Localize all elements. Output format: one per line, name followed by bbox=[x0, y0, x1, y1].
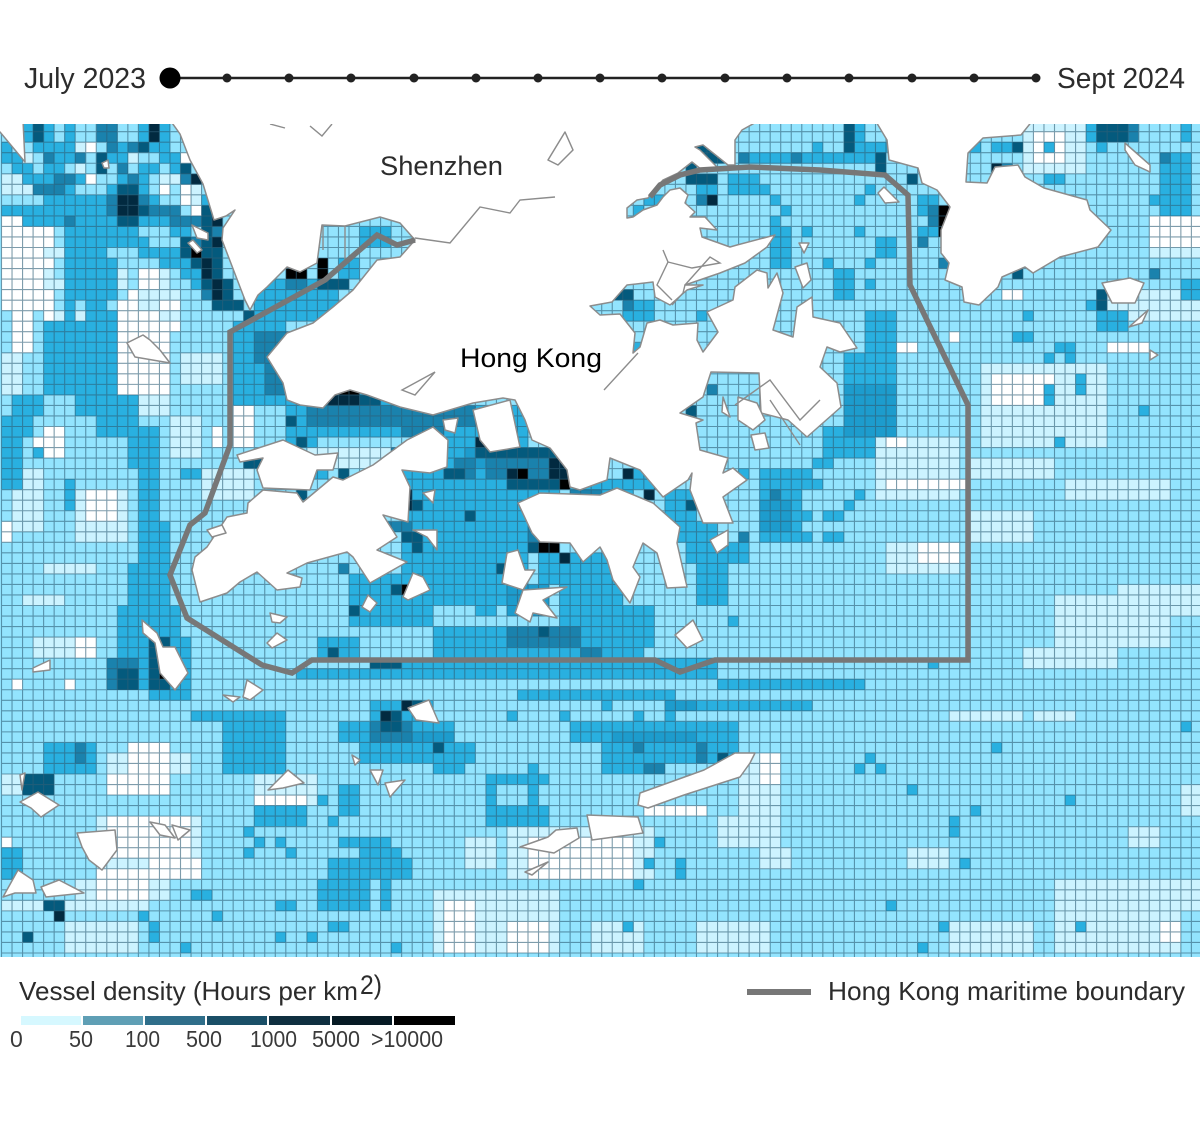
timeline steps bbox=[222, 74, 1040, 82]
lightest density cells bbox=[2, 121, 1200, 953]
timeline bbox=[24, 63, 1185, 95]
legend scale labels: 5000 bbox=[312, 1026, 360, 1052]
land border lines bbox=[270, 124, 820, 445]
land: eastern islets bbox=[722, 143, 1158, 450]
land masses bbox=[0, 120, 1158, 897]
stronger medium density cells bbox=[412, 384, 897, 742]
boundary label: Hong Kong maritime boundary bbox=[828, 976, 1185, 1006]
legend scale labels: >10000 bbox=[371, 1026, 443, 1052]
legend title superscript: 2) bbox=[360, 970, 382, 1000]
timeline start label: July 2023 bbox=[24, 63, 146, 95]
grid overlay bbox=[2, 121, 1200, 964]
land: Shenzhen and Hong Kong mainland bbox=[170, 120, 857, 523]
timeline track bbox=[170, 77, 1036, 79]
legend scale labels bbox=[10, 1026, 443, 1052]
legend scale labels: 50 bbox=[69, 1026, 93, 1052]
land: Lantau Island bbox=[192, 427, 448, 602]
timeline current position bbox=[160, 68, 180, 88]
white zero-density cells bbox=[2, 132, 1200, 953]
land: Dapeng peninsula bbox=[875, 120, 1111, 305]
land: Wailingding bbox=[408, 700, 439, 723]
medium density cells bbox=[2, 121, 1200, 953]
land: islets around Lantau bbox=[207, 418, 458, 648]
land: Po Toi bbox=[675, 620, 703, 648]
land: Tung Lung bbox=[710, 530, 728, 553]
land: Neilingding area islets bbox=[102, 132, 573, 253]
land: Lamma Island bbox=[502, 550, 567, 622]
high density cells bbox=[33, 121, 1170, 774]
label: Shenzhen: Shenzhen bbox=[380, 151, 503, 181]
sea base colour bbox=[0, 124, 1200, 957]
legend scale labels: 1000 bbox=[250, 1026, 297, 1052]
label: Hong Kong: Hong Kong bbox=[460, 343, 602, 373]
legend: vessel density bbox=[10, 970, 455, 1052]
extreme density cells bbox=[54, 121, 1002, 921]
land: Dangan east bbox=[638, 753, 755, 808]
legend scale labels: 100 bbox=[125, 1026, 160, 1052]
boundary swatch bbox=[747, 989, 811, 995]
map panel bbox=[0, 120, 1200, 964]
very high density cells bbox=[23, 121, 1128, 942]
land: north-west corner bbox=[0, 120, 25, 162]
land: Stonecutters bbox=[473, 400, 520, 452]
timeline end label: Sept 2024 bbox=[1057, 63, 1185, 95]
land: southern islands bbox=[3, 755, 643, 897]
legend scale labels: 500 bbox=[186, 1026, 222, 1052]
land: Chek Lap Kok bbox=[237, 440, 338, 490]
legend title: Vessel density (Hours per km bbox=[19, 976, 358, 1006]
legend scale labels: 0 bbox=[10, 1026, 23, 1052]
land: Hong Kong Island bbox=[518, 488, 687, 603]
land: Guishan and Wanshan islands bbox=[33, 335, 263, 702]
black maximum density cells bbox=[159, 205, 949, 679]
density heatmap cells bbox=[2, 121, 1200, 953]
Hong Kong maritime boundary bbox=[170, 167, 968, 673]
legend colour bar bbox=[21, 1016, 455, 1025]
